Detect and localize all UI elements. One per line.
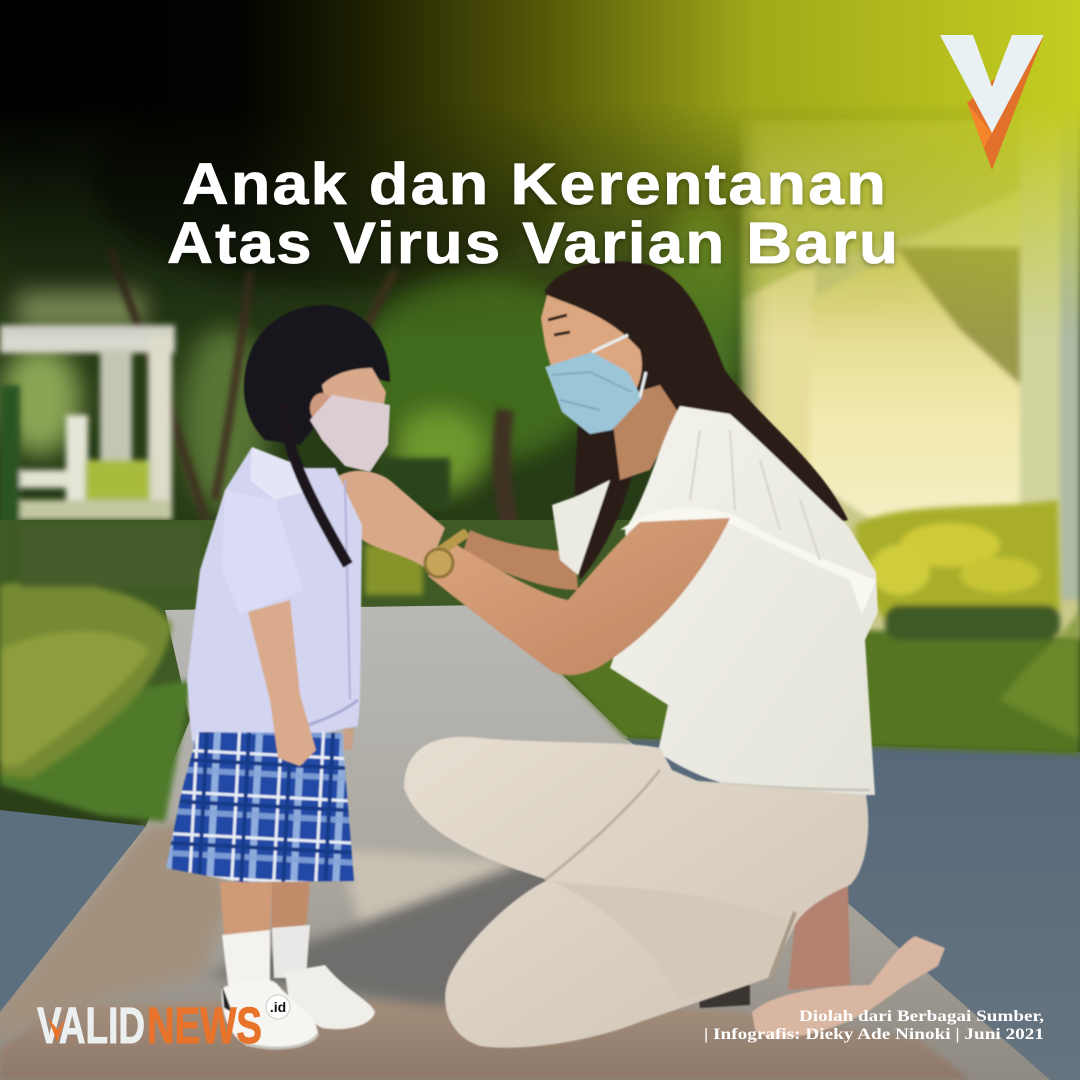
shoes	[222, 965, 375, 1048]
braid	[283, 405, 348, 565]
title: Anak dan Kerentanan	[182, 152, 888, 217]
pergola	[0, 325, 175, 550]
dark rear shoe	[698, 985, 750, 1008]
title: Atas Virus Varian Baru	[167, 211, 900, 276]
trousers	[404, 737, 868, 1048]
source credit: | Infografis: Dieky Ade Ninoki | Juni 2021	[704, 1026, 1044, 1043]
sun patch on path	[340, 850, 540, 925]
mule shoe	[752, 936, 945, 1038]
source credit	[704, 1008, 1044, 1043]
woman figure	[332, 261, 945, 1048]
bottom gravel	[0, 998, 970, 1080]
shirt	[187, 447, 362, 750]
hedges and grass left	[0, 458, 450, 822]
legs	[220, 882, 310, 935]
watch	[425, 528, 470, 577]
lower leg	[788, 885, 850, 990]
skirt	[166, 732, 354, 882]
logo: Validnews wordmark	[37, 995, 290, 1054]
face mask	[545, 335, 646, 434]
title	[167, 152, 900, 276]
trees	[0, 70, 745, 540]
neck	[610, 385, 680, 480]
socks	[222, 925, 310, 985]
back hair	[545, 261, 848, 580]
face	[322, 368, 386, 425]
child far arm	[344, 728, 354, 750]
right paving	[625, 738, 1080, 1080]
near arm	[428, 518, 730, 675]
top gradient overlay	[0, 0, 1080, 340]
house	[740, 60, 1080, 640]
child face mask	[310, 395, 390, 472]
source credit: Diolah dari Berbagai Sumber,	[799, 1008, 1044, 1025]
ear	[310, 393, 334, 423]
eye and brow	[548, 315, 570, 335]
child figure	[166, 305, 390, 1048]
logo: Validnews wordmark: VALID	[37, 997, 145, 1054]
left paving	[0, 810, 146, 1012]
hair back and fringe	[244, 305, 390, 445]
shadow on path	[205, 860, 640, 1010]
path surface	[0, 605, 1060, 1080]
logo: V mark	[940, 35, 1044, 170]
upper path and grass ground	[0, 520, 760, 760]
face	[541, 295, 642, 425]
tree trunks	[110, 250, 510, 530]
logo: Validnews wordmark: .id	[270, 999, 286, 1015]
hedges and lawn right	[555, 500, 1080, 755]
sandy left band of path	[0, 820, 230, 1040]
far arm	[462, 530, 578, 590]
child arm	[248, 600, 316, 766]
logo: Validnews wordmark: NEWS	[147, 997, 262, 1054]
blouse	[552, 406, 878, 795]
hand	[332, 471, 445, 570]
